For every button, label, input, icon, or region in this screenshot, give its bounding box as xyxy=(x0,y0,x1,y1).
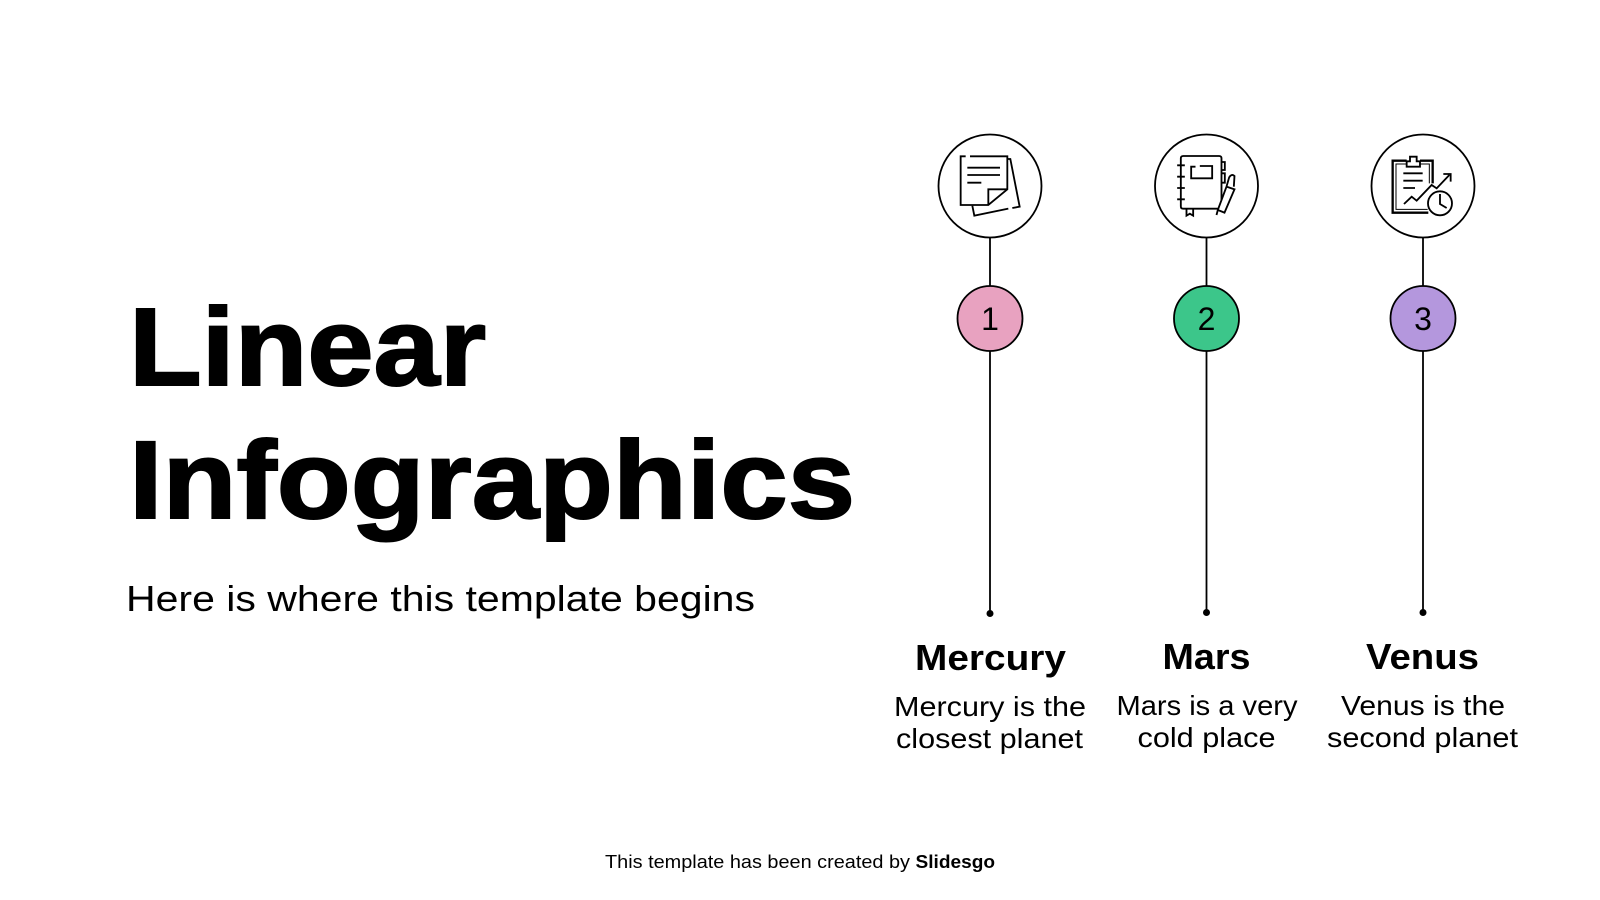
description: Venus xyxy=(1327,690,1518,753)
description: Mars: Mars is a very xyxy=(1116,690,1298,721)
description: Venus: Venus is the xyxy=(1341,690,1505,721)
description: Mars xyxy=(1116,690,1298,753)
heading: Mars: Mars xyxy=(1162,636,1250,677)
subtitle: Here is where this template begins xyxy=(126,578,755,619)
description: Mercury xyxy=(894,691,1086,754)
number badge 2 xyxy=(1174,286,1239,351)
panel: Venus column xyxy=(1327,134,1518,753)
connector line xyxy=(989,238,991,613)
heading: Venus: Venus xyxy=(1366,636,1479,677)
title: Linear xyxy=(129,286,486,409)
title: Infographics xyxy=(129,419,855,542)
end dot xyxy=(986,610,994,617)
description: Mercury: closest planet xyxy=(896,723,1083,754)
end dot xyxy=(1203,609,1210,616)
icon circle: notes xyxy=(938,134,1042,238)
heading: Mercury: Mercury xyxy=(915,637,1066,678)
description: Mars: cold place xyxy=(1138,722,1276,753)
footer credit: Slidesgo xyxy=(916,852,995,872)
description: Mercury: Mercury is the xyxy=(894,691,1086,722)
number badge 1 xyxy=(958,286,1022,351)
description: Venus: second planet xyxy=(1327,722,1518,753)
title xyxy=(129,286,855,542)
connector line xyxy=(1422,238,1424,612)
connector line xyxy=(1206,238,1208,612)
number badge 2: 2 xyxy=(1198,301,1215,337)
icon circle: clipboard with chart and clock xyxy=(1372,134,1474,238)
number badge 3: 3 xyxy=(1414,301,1432,337)
end dot xyxy=(1420,609,1426,616)
number badge 3 xyxy=(1390,286,1456,351)
footer credit: This template has been created by xyxy=(605,852,910,872)
icon circle: notebook and pen xyxy=(1155,134,1258,238)
number badge 1: 1 xyxy=(981,301,999,337)
panel: Mercury column xyxy=(894,134,1086,754)
panel: Mars column xyxy=(1116,134,1298,753)
